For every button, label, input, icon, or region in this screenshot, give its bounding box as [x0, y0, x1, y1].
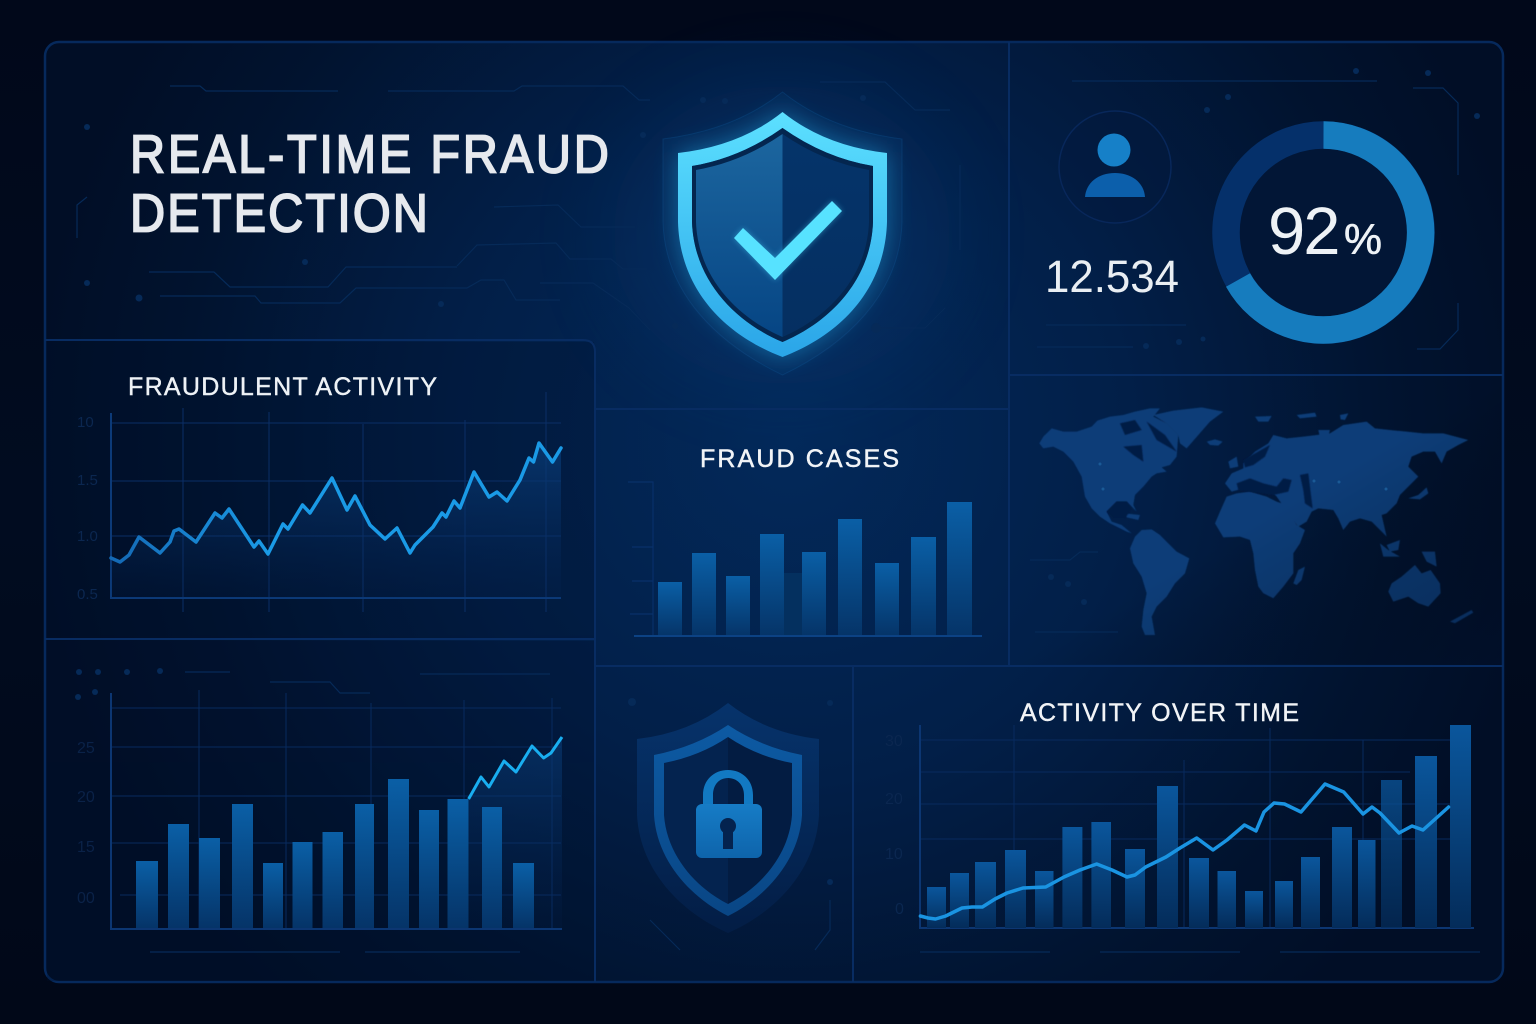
- title: [130, 123, 609, 243]
- world map: [1012, 378, 1501, 664]
- donut chart 92%: 92: [1268, 194, 1340, 269]
- icon: user: [1059, 111, 1171, 223]
- donut chart 92%: [1226, 135, 1421, 330]
- user count: 12.534: [1045, 251, 1179, 302]
- circuit decoration: [75, 68, 1480, 952]
- panel: combined bar and line chart: [77, 690, 562, 929]
- panel: fraudulent activity line chart: [77, 373, 561, 612]
- panel: combined bar and line chart: 00: [77, 890, 95, 907]
- panel: fraudulent activity line chart: 10: [77, 414, 94, 431]
- heading: FRAUDULENT ACTIVITY: [128, 373, 437, 401]
- panel: activity over time chart: 10: [885, 846, 903, 863]
- panel: fraudulent activity line chart: 1.5: [77, 472, 98, 489]
- heading: ACTIVITY OVER TIME: [1020, 699, 1299, 727]
- title: REAL-TIME FRAUD: [130, 123, 609, 184]
- panel: combined bar and line chart: 20: [77, 789, 95, 806]
- panel: activity over time chart: 20: [885, 791, 903, 808]
- icon: main shield with check: [663, 92, 902, 375]
- donut chart 92%: %: [1344, 216, 1382, 264]
- panel: fraud cases bar chart: [628, 445, 982, 636]
- icon: lock shield: [637, 703, 819, 933]
- panel: activity over time chart: [885, 699, 1474, 928]
- panel: fraudulent activity line chart: 0.5: [77, 586, 98, 603]
- panel: activity over time chart: 0: [895, 901, 904, 918]
- panel: combined bar and line chart: 25: [77, 740, 95, 757]
- title: DETECTION: [130, 182, 428, 243]
- panel: combined bar and line chart: 15: [77, 839, 95, 856]
- heading: FRAUD CASES: [700, 445, 899, 473]
- panel: activity over time chart: 30: [885, 733, 903, 750]
- panel: fraudulent activity line chart: 1.0: [77, 528, 98, 545]
